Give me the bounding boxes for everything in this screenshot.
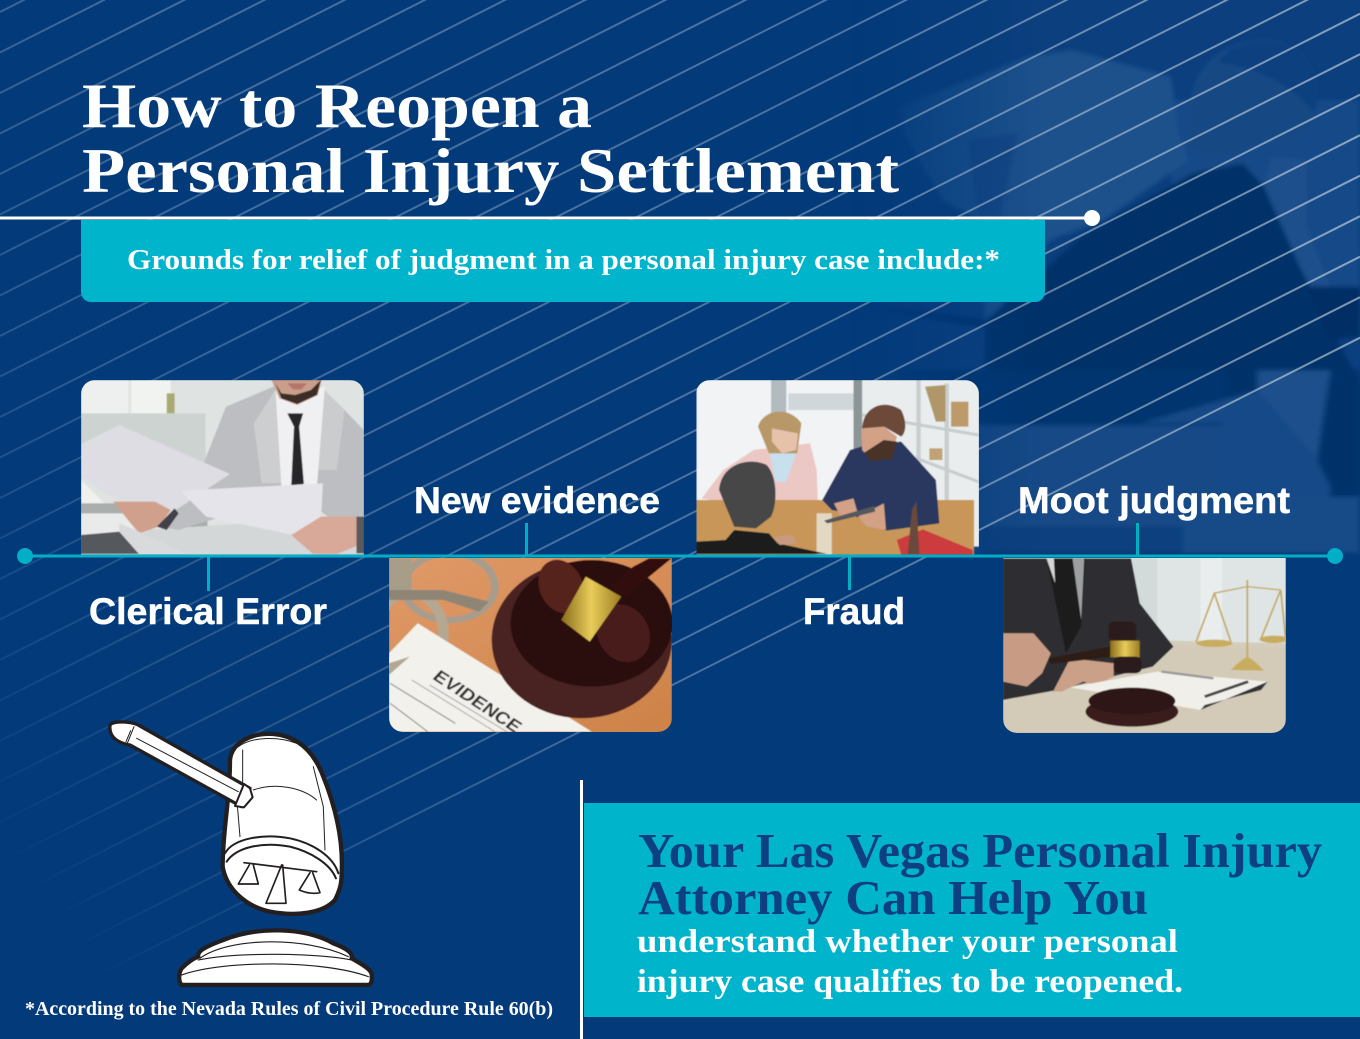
- photo: gavel with handcuffs and evidence form: [376, 553, 673, 736]
- subtitle band: [81, 220, 1045, 302]
- label: fraud: Fraud: [803, 591, 905, 632]
- title underline with end dot: [0, 210, 1100, 226]
- label: moot judgment: Moot judgment: [1018, 480, 1290, 521]
- callout panel: Attorney Can Help You: [638, 870, 1148, 925]
- callout panel: [584, 803, 1360, 1017]
- title: [82, 70, 900, 206]
- label: new evidence: New evidence: [414, 480, 660, 521]
- photo: couple consulting with lawyer: [696, 380, 979, 555]
- vertical divider: [580, 780, 583, 1039]
- footnote: *According to the Nevada Rules of Civil Procedure Rule 60(b): [25, 999, 553, 1020]
- title: How to Reopen a: [82, 70, 592, 141]
- title: Personal Injury Settlement: [82, 135, 900, 206]
- label: clerical error: Clerical Error: [89, 591, 327, 632]
- background photo: man with back pain: [914, 0, 1360, 555]
- photo: judge striking gavel with scales: [1003, 557, 1289, 733]
- callout panel: injury case qualifies to be reopened.: [637, 964, 1183, 1000]
- icon: gavel illustration: [110, 722, 372, 985]
- callout panel: Your Las Vegas Personal Injury: [638, 823, 1322, 878]
- photo: gavel with handcuffs and evidence form: EVIDENCE: [429, 666, 526, 736]
- subtitle band: Grounds for relief of judgment in a personal injury case include:*: [127, 244, 1000, 276]
- photo: man in gray suit reading papers: [81, 380, 364, 555]
- callout panel: understand whether your personal: [637, 924, 1178, 960]
- timeline: [17, 523, 1343, 591]
